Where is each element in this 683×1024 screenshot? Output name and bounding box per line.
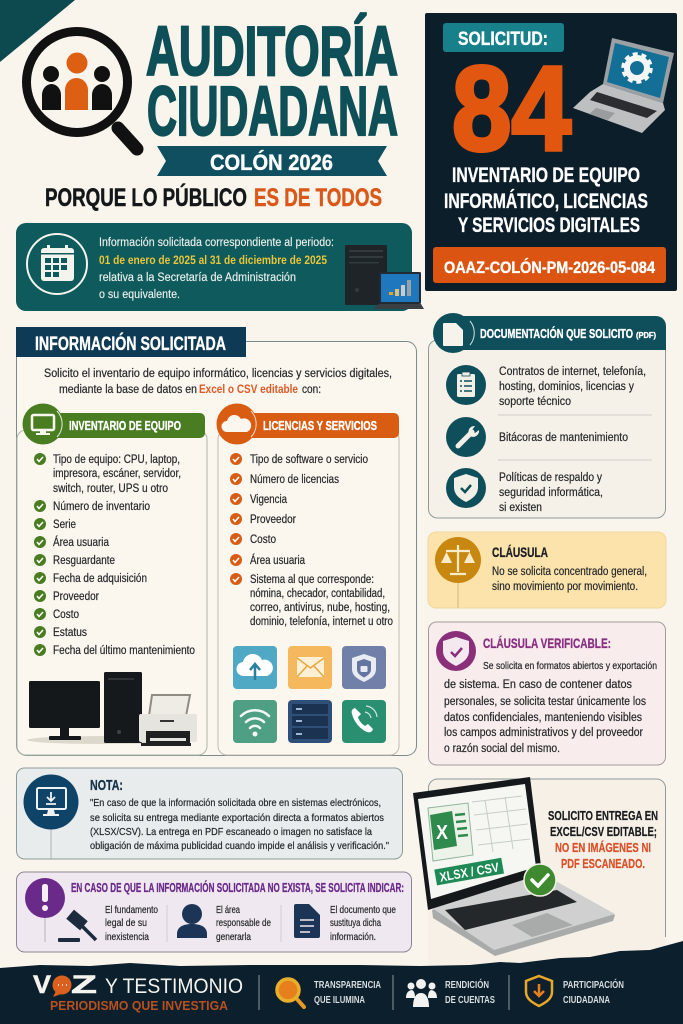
text: transparencia bbox=[314, 979, 381, 1006]
text: period details: Información solicitada correspondiente al periodo: bbox=[99, 237, 334, 249]
list: license fields: Proveedor bbox=[250, 514, 296, 526]
heading bbox=[16, 327, 246, 357]
heading: no existe: EN CASO DE QUE LA INFORMACIÓN SOLICITADA NO EXISTA, SE SOLICITA INDICAR: bbox=[71, 880, 404, 895]
text: fundamento: legal de su bbox=[105, 918, 147, 929]
icon: monitor download bbox=[24, 774, 78, 830]
text: entrega: NO EN IMÁGENES NI bbox=[555, 840, 651, 855]
text: request subject bbox=[444, 164, 648, 237]
label: solicitud: SOLICITUD: bbox=[458, 29, 548, 50]
text: cláusula verificable: personales, se solicita testar únicamente los bbox=[444, 696, 646, 708]
panel: period bbox=[16, 223, 424, 311]
text: nota bbox=[90, 777, 389, 852]
text: rendición: DE CUENTAS bbox=[445, 994, 495, 1006]
illustration: laptop excel: X bbox=[436, 822, 449, 844]
text: participación: PARTICIPACIÓN bbox=[563, 978, 624, 991]
icon: calendar bbox=[27, 234, 87, 294]
icon: security shield tile bbox=[342, 646, 386, 689]
icon: document bbox=[294, 904, 320, 938]
logo: voz y testimonio bbox=[33, 971, 243, 1013]
icon: desktop tower and laptop bbox=[345, 245, 424, 309]
panel: documentación bbox=[428, 313, 666, 518]
icon: purple shield bbox=[436, 631, 476, 671]
text: contratos: Contratos de internet, telefonía, bbox=[499, 366, 646, 378]
icon: clipboard bbox=[446, 365, 486, 405]
folio badge bbox=[433, 247, 666, 283]
panel: nota bbox=[16, 768, 402, 859]
panel: cláusula verificable bbox=[428, 622, 666, 765]
heading: INFORMACIÓN SOLICITADA bbox=[35, 333, 226, 355]
text: documento sustituto: sustituya dicha bbox=[330, 918, 381, 929]
corner triangle bbox=[0, 0, 75, 62]
list: license fields: Número de licencias bbox=[250, 474, 339, 486]
list: license fields: Costo bbox=[250, 534, 276, 546]
text: nota: (XLSX/CSV). La entrega en PDF escaneado o imagen no satisface la bbox=[90, 826, 372, 838]
list: license fields: Tipo de software o servicio bbox=[250, 454, 368, 466]
list: equipment fields: switch, router, UPS u otro bbox=[53, 483, 168, 495]
list: license fields bbox=[230, 453, 393, 628]
text: period details bbox=[99, 237, 334, 301]
text: cláusula verificable: Se solicita en formatos abiertos y exportación bbox=[483, 661, 657, 672]
text: cláusula bbox=[492, 544, 647, 593]
text: cláusula: CLÁUSULA bbox=[492, 544, 548, 560]
text: políticas: Políticas de respaldo y bbox=[499, 472, 602, 484]
text: políticas: seguridad informática, bbox=[499, 487, 603, 499]
label: solicitud bbox=[443, 23, 564, 52]
label: xlsx / csv: XLSX / CSV bbox=[438, 859, 500, 885]
text: cláusula verificable: datos confidenciales, manteniendo visibles bbox=[444, 712, 642, 724]
list: license fields: nómina, checador, contabilidad, bbox=[250, 588, 385, 600]
list: equipment fields: Área usuaria bbox=[53, 536, 110, 549]
icon: person bbox=[177, 904, 207, 938]
list: equipment fields: Estatus bbox=[53, 627, 87, 639]
icon: check badge bbox=[524, 864, 556, 896]
intro text: con: bbox=[302, 384, 321, 396]
list: equipment fields: Número de inventario bbox=[53, 501, 150, 513]
text: políticas: si existen bbox=[499, 502, 542, 514]
icon: mail tile bbox=[288, 646, 332, 689]
list: license fields: Sistema al que corresponde: bbox=[250, 574, 374, 586]
text: rendición bbox=[445, 978, 495, 1006]
card: licencias y servicios bbox=[216, 404, 399, 755]
text: transparencia: QUE ILUMINA bbox=[314, 994, 365, 1006]
text: contratos bbox=[499, 366, 646, 408]
text: entrega: PDF ESCANEADO. bbox=[561, 856, 645, 871]
icon: transparency magnifier bbox=[277, 979, 304, 1007]
text: cláusula verificable: CLÁUSULA VERIFICABLE: bbox=[483, 635, 611, 651]
text: contratos: hosting, dominios, licencias y bbox=[499, 381, 634, 393]
text: cláusula verificable bbox=[444, 635, 657, 755]
illustration: laptop excel bbox=[413, 777, 615, 956]
text: cláusula: sino movimiento por movimiento. bbox=[492, 581, 638, 593]
list: license fields: Vigencia bbox=[250, 494, 288, 506]
text: cláusula verificable: o razón social del mismo. bbox=[444, 743, 560, 755]
icon: wifi tile bbox=[233, 700, 277, 743]
title: CIUDADANA bbox=[147, 72, 398, 150]
header: documentación: DOCUMENTACIÓN QUE SOLICITO bbox=[480, 326, 633, 341]
icon: shield bbox=[446, 468, 486, 508]
intro text: Solicito el inventario de equipo informático, licencias y servicios digitales, bbox=[44, 368, 392, 380]
list: equipment fields: Tipo de equipo: CPU, laptop, bbox=[53, 454, 180, 466]
text: fundamento bbox=[105, 905, 158, 943]
icon: wrench bbox=[446, 417, 486, 457]
header: inventario bbox=[22, 404, 205, 444]
list: equipment fields: Fecha del último mantenimiento bbox=[53, 645, 195, 657]
text: participación bbox=[563, 978, 624, 1006]
card: inventario de equipo bbox=[17, 404, 207, 755]
text: nota: "En caso de que la información solicitada obre en sistemas electrónicos, bbox=[90, 797, 381, 809]
intro text: Excel o CSV editable bbox=[199, 384, 298, 396]
text: contratos: soporte técnico bbox=[499, 396, 571, 408]
logo: voz y testimonio: Y TESTIMONIO bbox=[105, 975, 243, 998]
header: licencias bbox=[216, 404, 399, 444]
header: inventario: INVENTARIO DE EQUIPO bbox=[69, 418, 181, 433]
intro text: mediante la base de datos en bbox=[59, 384, 197, 396]
ribbon: Colón 2026: COLÓN 2026 bbox=[210, 150, 333, 175]
icon: people bbox=[406, 979, 437, 1007]
slogan: ES DE TODOS bbox=[254, 184, 382, 212]
header: documentación bbox=[433, 313, 666, 353]
ribbon: Colón 2026 bbox=[157, 146, 387, 176]
list: equipment fields: Fecha de adquisición bbox=[53, 573, 147, 585]
icon: cloud upload tile bbox=[233, 646, 277, 689]
text: área responsable: generarla bbox=[216, 932, 251, 943]
text: área responsable: responsable de bbox=[216, 918, 271, 929]
header: licencias: LICENCIAS Y SERVICIOS bbox=[263, 418, 377, 433]
text: fundamento: inexistencia bbox=[105, 932, 149, 943]
icon: server tile bbox=[288, 700, 332, 743]
slogan: PORQUE LO PÚBLICO bbox=[45, 182, 247, 212]
icon: gavel bbox=[58, 910, 96, 942]
list: license fields: dominio, telefonía, internet u otro bbox=[250, 616, 393, 628]
text: documento sustituto bbox=[330, 905, 396, 943]
panel: si la información no existe bbox=[16, 872, 412, 952]
text: period details: relativa a la Secretaría de Administración bbox=[99, 272, 296, 284]
text: cláusula verificable: de sistema. En caso de contener datos bbox=[444, 679, 632, 691]
list: equipment fields: Resguardante bbox=[53, 555, 115, 567]
text: fundamento: El fundamento bbox=[105, 905, 158, 916]
text: bitácoras: Bitácoras de mantenimiento bbox=[499, 432, 628, 444]
text: documento sustituto: información. bbox=[330, 932, 376, 943]
intro text bbox=[44, 368, 392, 396]
panel: información solicitada bbox=[16, 327, 416, 756]
text: rendición: RENDICIÓN bbox=[445, 978, 489, 991]
panel: request 84 bbox=[425, 13, 677, 291]
text: entrega bbox=[548, 808, 658, 871]
logo: voz y testimonio: V bbox=[33, 971, 51, 999]
list: license fields: correo, antivirus, nube, hosting, bbox=[250, 602, 390, 614]
text: políticas bbox=[499, 472, 603, 514]
illustration: computer and printer bbox=[27, 672, 197, 746]
text: cláusula: No se solicita concentrado general, bbox=[492, 566, 647, 578]
icon: exclamation bbox=[25, 878, 65, 918]
list: equipment fields: impresora, escáner, servidor, bbox=[53, 468, 181, 480]
text: área responsable: El área bbox=[216, 905, 240, 916]
number 84: 84 bbox=[452, 42, 571, 176]
logo: voz y testimonio: PERIODISMO QUE INVESTIGA bbox=[50, 999, 228, 1013]
text: participación: CIUDADANA bbox=[563, 994, 610, 1006]
title: AUDITORÍA bbox=[146, 12, 398, 90]
text: área responsable bbox=[216, 905, 271, 943]
panel: entrega en excel bbox=[413, 777, 666, 969]
icon: participation shield bbox=[526, 976, 552, 1006]
text: nota: se solicita su entrega mediante exportación directa a formatos abiertos bbox=[90, 812, 384, 824]
list: equipment fields: Proveedor bbox=[53, 591, 99, 603]
text: cláusula verificable: los campos administrativos y del proveedor bbox=[444, 727, 643, 739]
list: equipment fields: Costo bbox=[53, 609, 79, 621]
text: documento sustituto: El documento que bbox=[330, 905, 396, 916]
text: transparencia: TRANSPARENCIA bbox=[314, 979, 381, 991]
icon: magnifier with citizens bbox=[26, 32, 137, 149]
icon: laptop with gear bbox=[573, 38, 674, 133]
text: nota: NOTA: bbox=[90, 777, 123, 794]
text: nota: obligación de máxima publicidad cuando impide el análisis y verificación." bbox=[90, 840, 389, 852]
panel: cláusula bbox=[428, 532, 666, 608]
text: period details: o su equivalente. bbox=[99, 289, 180, 301]
icon: phone tile bbox=[342, 700, 386, 743]
list: equipment fields: Serie bbox=[53, 519, 76, 531]
logo: voz y testimonio: Z bbox=[71, 971, 97, 999]
title bbox=[146, 12, 398, 150]
list: license fields: Área usuaria bbox=[250, 554, 305, 567]
list: equipment fields bbox=[34, 453, 195, 657]
header: documentación: (PDF) bbox=[636, 331, 656, 340]
footer bbox=[0, 941, 683, 1024]
icon: scales bbox=[435, 537, 481, 583]
text: period details: 01 de enero de 2025 al 31 de diciembre de 2025 bbox=[99, 255, 328, 267]
